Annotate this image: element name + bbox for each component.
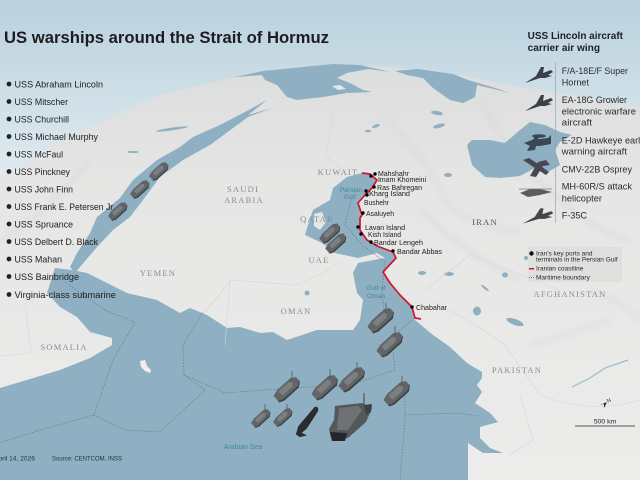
Black Sea	[235, 64, 390, 100]
Iranian ports and terminals: Chabahar	[416, 303, 448, 312]
aircraft names: helicopter	[562, 194, 602, 204]
aircraft names: Hornet	[562, 78, 589, 88]
aircraft names: MH-60R/S attack	[562, 182, 632, 192]
icon: EA-18G	[525, 95, 553, 111]
ship list: USS Pinckney	[14, 167, 70, 177]
Iranian ports and terminals: Kish Island	[368, 230, 401, 239]
Qatar peninsula	[314, 212, 326, 230]
aircraft names: EA-18G Growler	[562, 95, 627, 105]
ships in Red Sea	[107, 161, 170, 222]
maritime boundaries	[0, 195, 478, 480]
scale bar	[575, 418, 635, 426]
water labels: Gulf	[344, 194, 356, 201]
warships	[107, 161, 413, 441]
water labels	[224, 187, 386, 451]
ship list: USS Bainbridge	[14, 272, 79, 282]
aircraft names: aircraft	[562, 118, 592, 128]
ship list: USS John Finn	[14, 184, 73, 194]
ship list: USS Abraham Lincoln	[14, 80, 103, 90]
ship list: USS Michael Murphy	[14, 132, 98, 142]
Iranian ports and terminals: Bandar Lengeh	[374, 238, 423, 247]
ships in Arabian Sea	[250, 303, 413, 429]
air wing heading	[528, 31, 624, 54]
legend: Iranian coastline	[536, 266, 584, 272]
Iranian ports and terminals	[356, 169, 448, 312]
icon: CMV-22B Osprey	[523, 158, 550, 177]
ship list	[7, 80, 116, 300]
Iranian ports and terminals: Imam Khomeini	[378, 175, 426, 184]
icon: F-35C	[523, 208, 553, 224]
water labels: Persian	[340, 187, 363, 194]
country labels: ARABIA	[224, 195, 264, 205]
country labels: YEMEN	[140, 268, 176, 278]
air wing heading: USS Lincoln aircraft	[528, 31, 624, 42]
ship list: USS Mitscher	[14, 97, 68, 107]
Red Sea	[70, 100, 272, 273]
ship list: USS Mahan	[14, 254, 62, 264]
sky background	[0, 0, 640, 200]
submarine	[297, 408, 317, 436]
ship list: USS Delbert D. Black	[14, 237, 98, 247]
ship list: USS Churchill	[14, 114, 69, 124]
Persian Gulf, Gulf of Oman, Arabian Sea	[0, 173, 503, 480]
legend: terminals in the Persian Gulf	[536, 256, 618, 264]
ships in Persian Gulf	[318, 222, 348, 255]
air wing heading: carrier air wing	[528, 43, 600, 54]
source: Source: CENTCOM, INSS	[52, 456, 123, 462]
country labels: OMAN	[281, 306, 311, 316]
country labels: PAKISTAN	[492, 365, 542, 375]
aircraft names: F/A-18E/F Super	[562, 66, 628, 76]
water labels: Oman	[367, 293, 385, 300]
Iranian ports and terminals: Bandar Abbas	[397, 247, 442, 256]
icon: E-2D Hawkeye	[524, 134, 551, 151]
icon: MH-60 helicopter	[519, 189, 552, 197]
Iranian ports and terminals: Kharg Island	[369, 189, 410, 198]
air wing panel	[519, 62, 640, 224]
legend: Iran's key ports and	[536, 250, 593, 258]
water labels: Arabian Sea	[224, 444, 262, 451]
Iranian ports and terminals: Ras Bahregan	[377, 183, 422, 192]
Iranian ports and terminals: Mahshahr	[378, 169, 409, 178]
ship list: Virginia-class submarine	[14, 290, 116, 300]
country labels: KUWAIT	[318, 167, 358, 177]
aircraft carrier	[329, 393, 372, 441]
scale bar: 500 km	[594, 418, 616, 426]
aircraft names: electronic warfare	[562, 106, 636, 116]
mountain shading	[0, 100, 640, 345]
aircraft names	[561, 66, 640, 220]
legend	[528, 247, 622, 282]
land inside Black Sea	[332, 85, 346, 90]
water labels: Gulf of	[366, 285, 386, 292]
land borders	[0, 115, 640, 455]
Iranian ports and terminals: Lavan Island	[365, 223, 405, 232]
legend: Maritime boundary	[536, 274, 591, 282]
country labels: IRAN	[472, 217, 498, 227]
Iranian coastline	[358, 173, 421, 319]
country labels: UAE	[308, 255, 330, 265]
country labels	[40, 167, 606, 375]
aircraft names: CMV-22B Osprey	[562, 164, 632, 174]
title: US warships around the Strait of Hormuz	[4, 29, 329, 47]
aircraft names: F-35C	[562, 210, 587, 220]
north arrow: N	[606, 398, 612, 405]
country labels: QATAR	[300, 214, 334, 224]
country labels: SOMALIA	[40, 342, 88, 352]
country labels: SAUDI	[227, 184, 259, 194]
Iranian ports and terminals: Asaluyeh	[366, 209, 394, 218]
aircraft names: warning aircraft	[561, 146, 627, 156]
north arrow	[600, 398, 612, 408]
Socotra	[140, 360, 151, 373]
lakes	[127, 110, 628, 387]
icon: F/A-18	[525, 67, 553, 83]
Iranian ports and terminals: Bushehr	[364, 198, 389, 207]
country labels: AFGHANISTAN	[534, 289, 606, 299]
northern sea	[395, 69, 510, 103]
Caspian region	[467, 122, 572, 178]
ship list: USS Frank E. Petersen Jr.	[14, 202, 115, 212]
ship list: USS Spruance	[14, 220, 73, 230]
ship list: USS McFaul	[14, 150, 63, 160]
